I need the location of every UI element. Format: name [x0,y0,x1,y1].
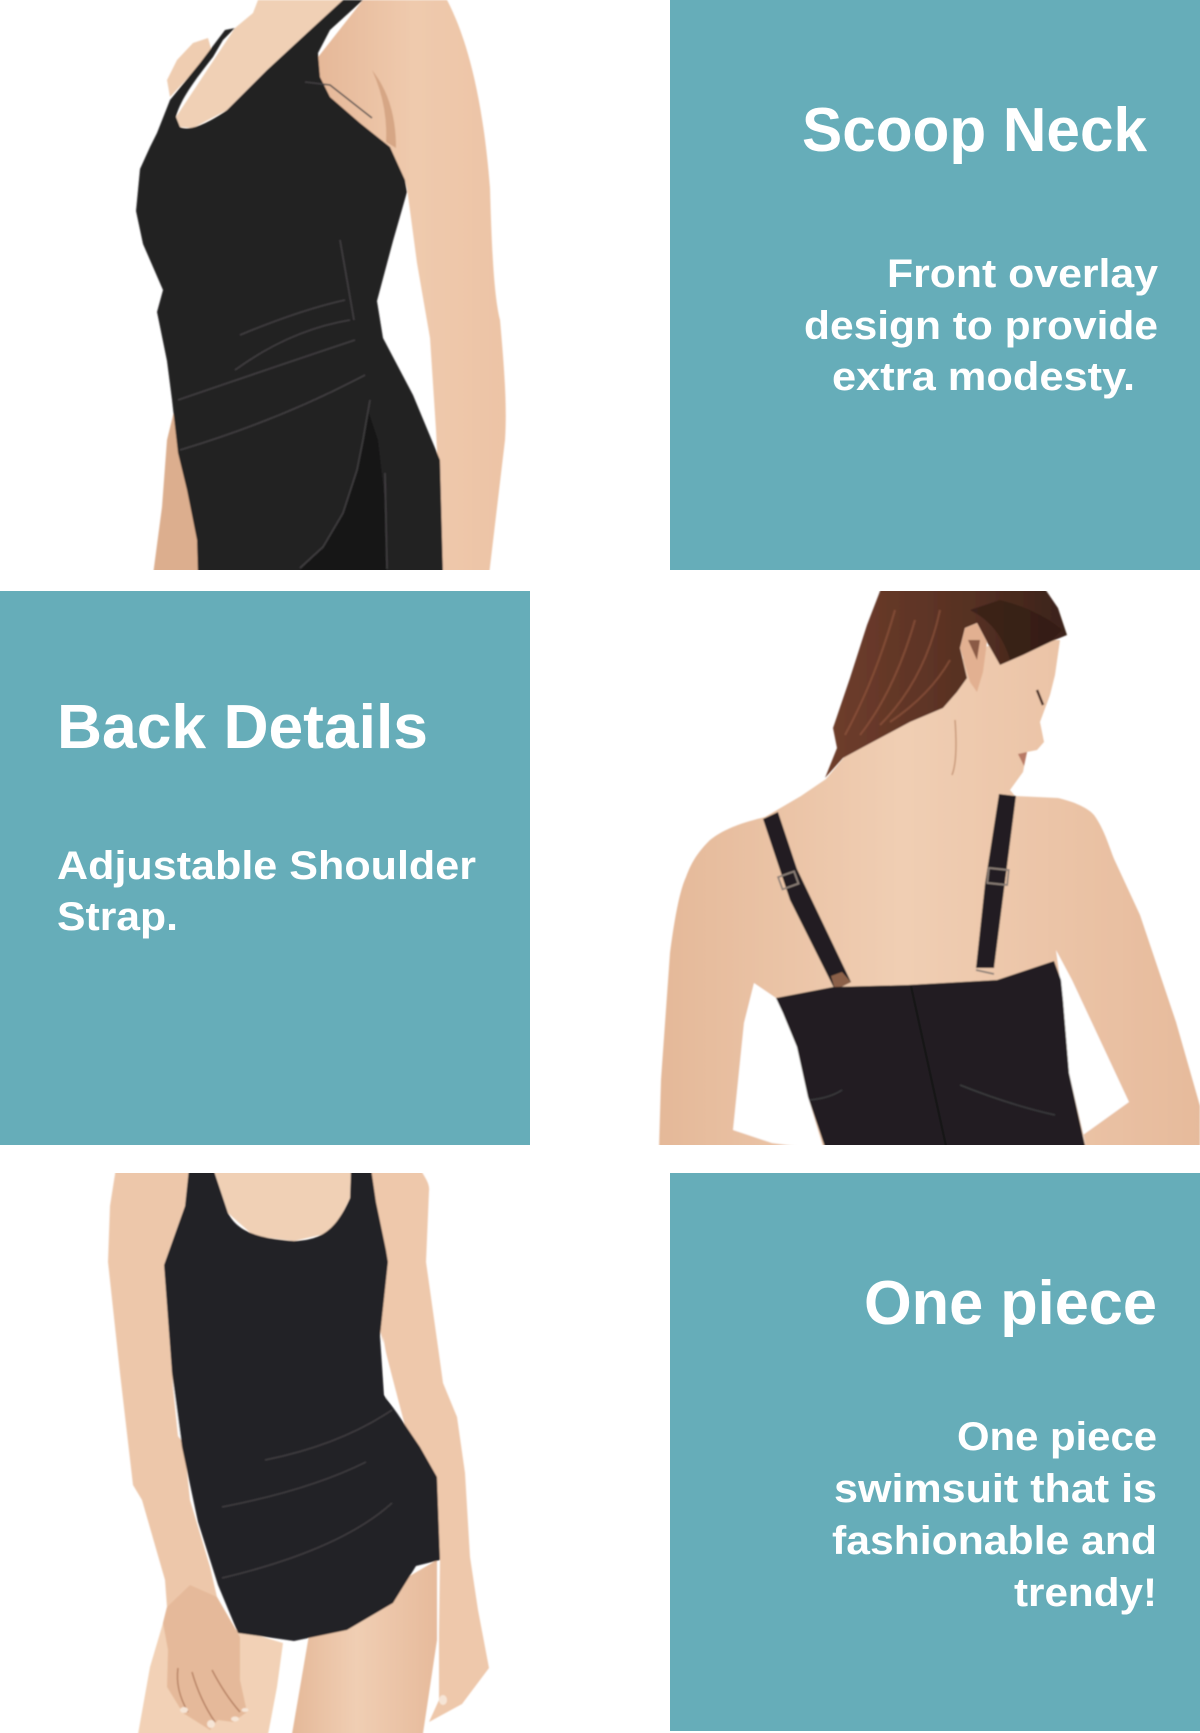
text block: back details description: Strap. [57,895,178,939]
heading: One piece: One piece [864,1269,1157,1338]
panel: back details [0,591,530,1145]
heading: Back Details: Back Details [57,693,428,762]
text block: one piece description: swimsuit that is [834,1467,1157,1511]
text block: one piece description: fashionable and [832,1519,1157,1563]
text block: one piece description [832,1415,1157,1615]
text block: scoop neck description: design to provide [804,304,1158,348]
text block: one piece description: trendy! [1014,1571,1157,1615]
panel: one piece [670,1173,1200,1731]
text block: scoop neck description [804,252,1159,399]
text block: one piece description: One piece [957,1415,1157,1459]
text block: scoop neck description: extra modesty. [832,355,1135,399]
text block: back details description: Adjustable Shoulder [57,844,476,888]
photo: woman in black swimsuit, front three-quarter view [136,0,506,575]
photo: woman from behind showing adjustable straps [659,586,1200,1150]
text block: scoop neck description: Front overlay [887,252,1159,296]
photo: woman in black one-piece swim dress, front view [108,1168,489,1733]
heading: Scoop Neck: Scoop Neck [802,96,1147,165]
panel: scoop neck [670,0,1200,570]
text block: back details description [57,844,476,939]
